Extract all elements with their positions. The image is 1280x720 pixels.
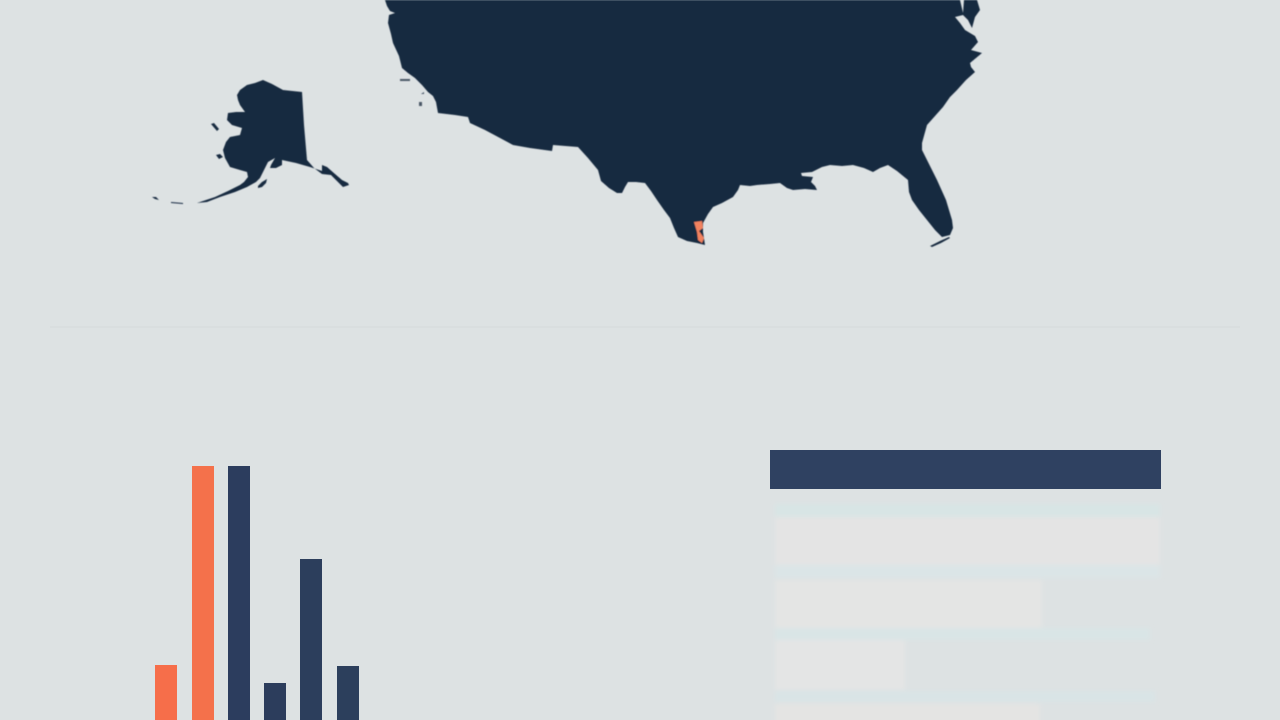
map: contiguous United States xyxy=(385,0,982,247)
bar: navy short xyxy=(264,683,286,720)
table panel xyxy=(770,450,1161,720)
bar chart xyxy=(155,466,359,720)
bar: orange short xyxy=(155,665,177,720)
bar: navy medium xyxy=(300,559,322,720)
bar: orange tall xyxy=(192,466,214,720)
bar: navy small xyxy=(337,666,359,720)
table header bar xyxy=(770,450,1161,489)
table row stripes xyxy=(775,504,1160,720)
map: Alaska xyxy=(152,80,349,204)
bar: navy tall xyxy=(228,466,250,720)
highlight: south Texas xyxy=(694,221,704,243)
